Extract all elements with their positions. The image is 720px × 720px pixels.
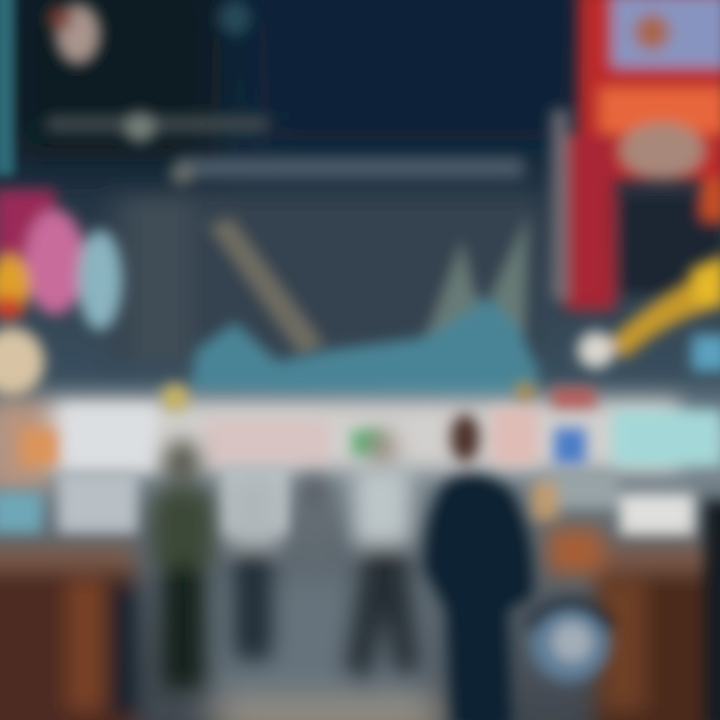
- right wooden desk: [548, 528, 720, 720]
- dark ceiling: [10, 0, 570, 160]
- teal mountain chart: [190, 215, 540, 398]
- right edge dark figure: [704, 500, 720, 720]
- person in white and dark trousers: [226, 474, 282, 660]
- person in dark jacket foreground: [424, 414, 533, 720]
- distant person: [300, 474, 330, 555]
- left colourful sign: [0, 190, 122, 396]
- right red and orange sign: [552, 0, 720, 310]
- ceiling banner text shapes: [45, 0, 525, 185]
- coloured screens: [20, 382, 720, 470]
- diagonal beam: [208, 218, 325, 358]
- person in white shirt: [345, 430, 420, 680]
- left wooden desk: [0, 545, 138, 720]
- truss structure: [110, 195, 540, 360]
- right yellow curved sign: [578, 255, 720, 371]
- bright counter band of screens: [0, 400, 680, 490]
- person in green: [152, 440, 214, 690]
- round bag: [530, 602, 610, 682]
- lower desk monitors: [0, 468, 694, 536]
- left teal strip: [0, 0, 14, 175]
- floor aisle: [205, 570, 445, 720]
